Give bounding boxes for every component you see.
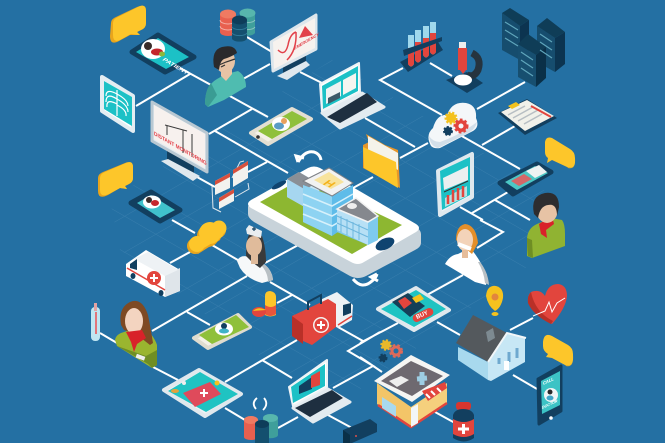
icon: arrow bottom [353, 274, 378, 285]
phone face [248, 166, 419, 264]
icon: speech bubble right [545, 138, 575, 168]
icon: tablet buy [378, 288, 449, 330]
icon: servers [502, 8, 565, 87]
icon: speech bubble bottom right [543, 335, 573, 366]
icon: pharmacy tablet [164, 370, 241, 416]
icon: thermometer [91, 303, 100, 341]
icon: distant monitoring monitor: DISTANT MONITORING [154, 131, 207, 167]
icon: gears bottom [380, 340, 402, 362]
panel: central smartphone with hospital [248, 166, 421, 278]
icon: nurse [237, 225, 273, 283]
icon: ambulance [126, 250, 180, 297]
icon: doctor [205, 46, 246, 107]
icon: calendars [212, 161, 249, 212]
icon: first aid kit with ambulance [292, 292, 353, 345]
icon: circular arrows bottom [254, 398, 266, 410]
icon: server box bottom [343, 419, 377, 443]
icon: data stack bottom [244, 414, 278, 443]
icon: microscope [446, 42, 483, 93]
icon: man with red scarf right [527, 193, 565, 258]
right hospital block [337, 198, 378, 245]
icon: heart [528, 284, 567, 324]
icon: medicine bottle [453, 402, 474, 442]
icon: cloud with gears [428, 103, 477, 148]
centre hospital tower [303, 168, 353, 236]
centre hospital tower: H [320, 178, 339, 189]
icon: tablet with chart [438, 154, 472, 215]
icon: speech bubble top left [110, 6, 146, 43]
icon: small phone bottom green [194, 315, 250, 348]
connector lines [100, 37, 537, 428]
icon: arrow top [296, 152, 321, 162]
icon: patient tablet: PATIENT [161, 57, 190, 76]
icon: phone call doctor [538, 366, 561, 424]
icon: yellow cloud [187, 220, 226, 254]
icon: woman doctor [115, 301, 157, 368]
icon: phone call doctor: DOCTOR [542, 398, 558, 410]
icon: monitor stethoscope: EMERGENCY [294, 32, 319, 51]
icon: small phone left [131, 192, 180, 221]
icon: monitor stethoscope [271, 15, 319, 80]
icon: house [456, 315, 526, 381]
icon: clipboard [498, 99, 557, 135]
icon: distant monitoring monitor [152, 102, 207, 181]
icon: location pin [486, 286, 503, 316]
icon: pharmacy building [374, 355, 450, 427]
icon: data stack top [220, 8, 256, 42]
icon: x-ray tablet [102, 77, 133, 131]
icon: phone green top [251, 109, 311, 144]
icon: folder [363, 134, 400, 188]
icon: patient tablet [132, 35, 194, 76]
left hospital block [287, 172, 322, 210]
icon: test tubes rack [400, 22, 443, 72]
green screen [260, 178, 402, 254]
icon: speech bubble left [98, 162, 133, 197]
phone body [248, 170, 421, 278]
icon: laptop bottom [289, 360, 350, 422]
icon: pills [252, 291, 276, 317]
icon: laptop top [320, 63, 384, 128]
icon: tablet buy: BUY [415, 310, 429, 321]
icon: phone call doctor: CALL [543, 376, 554, 386]
icon: male nurse [445, 224, 489, 285]
icon: phone with chart [500, 164, 551, 194]
